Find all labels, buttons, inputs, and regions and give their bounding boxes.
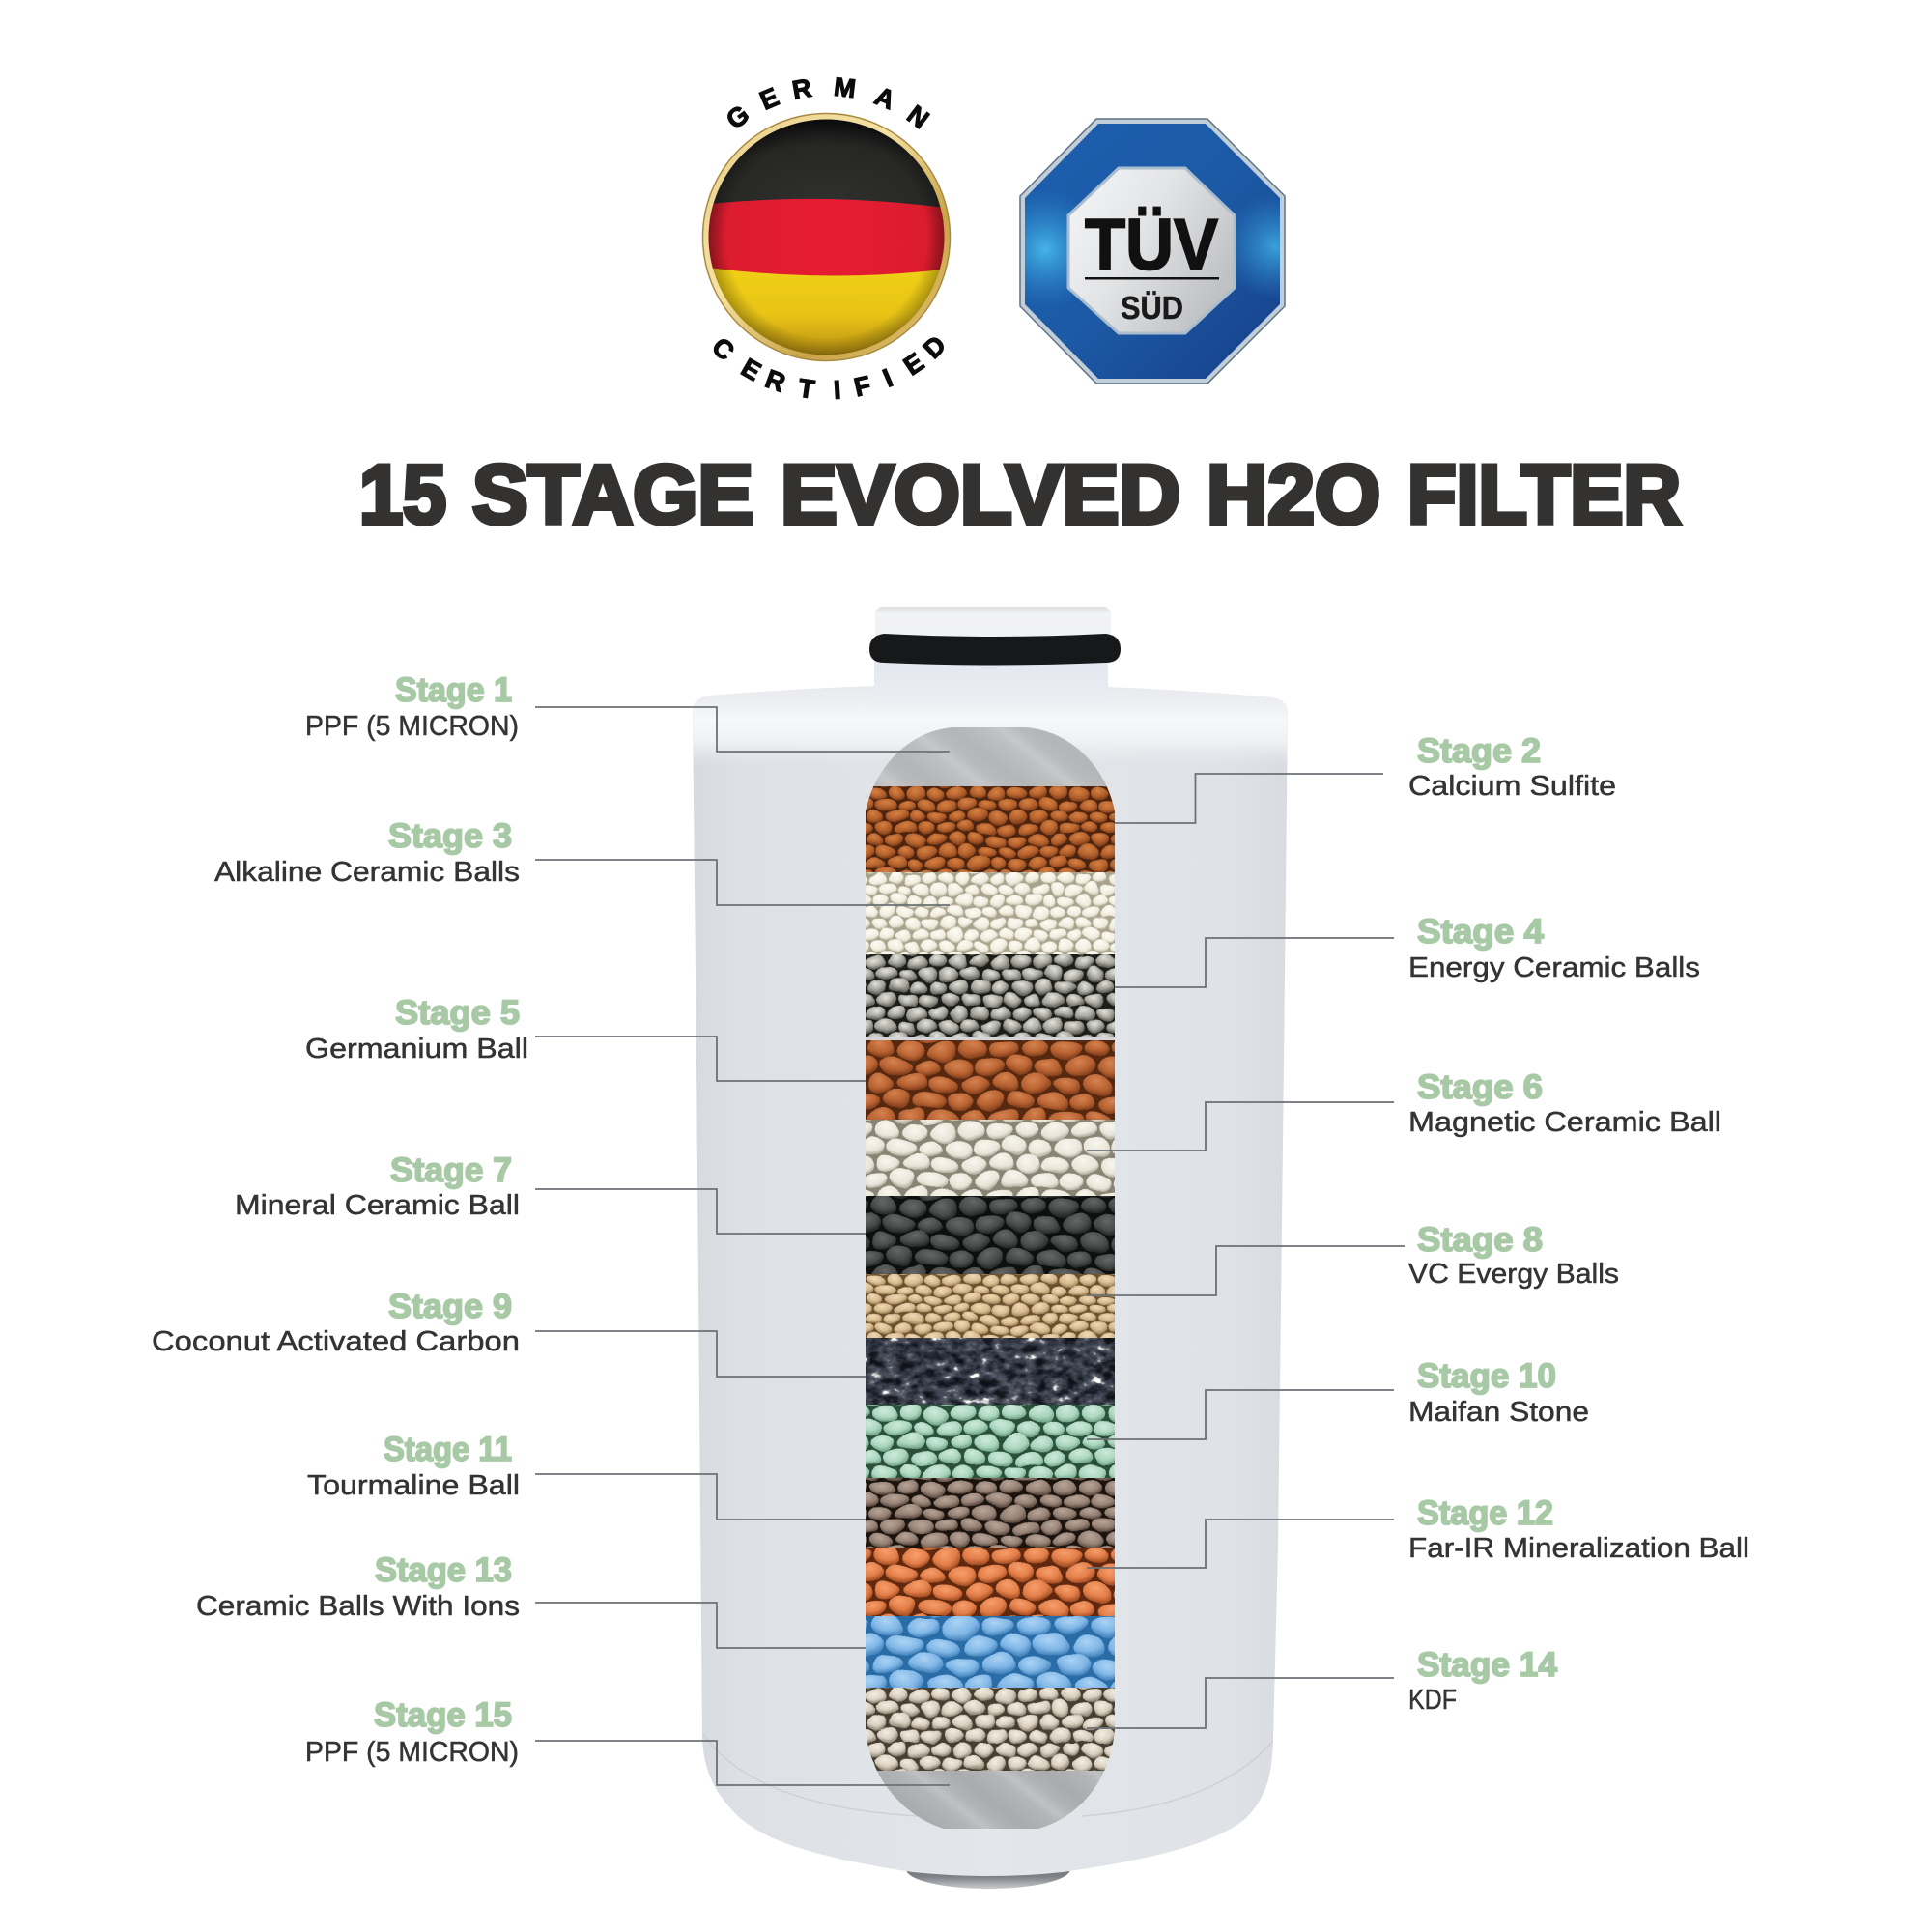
label: stage 4: Energy Ceramic Balls (1408, 952, 1700, 983)
label: stage 8 (1408, 1221, 1619, 1290)
leader: stage 5 (535, 1037, 866, 1081)
label: stage 3 (214, 817, 520, 888)
title: 15 (359, 448, 446, 541)
label: stage 14: KDF (1408, 1685, 1457, 1716)
filter cartridge (676, 607, 1304, 1893)
leader: stage 1 (535, 707, 950, 752)
cartridge body (676, 667, 1304, 1893)
title: H2O (1207, 448, 1380, 541)
bottom stub (906, 1850, 1070, 1889)
label: stage 1: PPF (5 MICRON) (305, 711, 519, 742)
label: stage 6 (1408, 1068, 1721, 1138)
arc text: GERMAN: N (901, 99, 934, 134)
layer: stage 7 (866, 1196, 1115, 1274)
layer: stage 10 (866, 1405, 1115, 1478)
label: stage 2: Calcium Sulfite (1408, 771, 1616, 802)
arc text: CERTIFIED: I (879, 363, 896, 393)
label: stage 4: Stage 4 (1417, 913, 1545, 951)
layer: stage 9 (866, 1338, 1115, 1405)
arc text: GERMAN: R (790, 73, 813, 105)
label: stage 10: Maifan Stone (1408, 1397, 1589, 1428)
label: stage 11: Stage 11 (384, 1431, 512, 1468)
leader: stage 13 (535, 1603, 866, 1648)
label: stage 3: Stage 3 (388, 817, 512, 855)
label: stage 7 (235, 1151, 520, 1221)
arc text: CERTIFIED: I (833, 376, 841, 405)
arc text: CERTIFIED: R (761, 364, 789, 398)
label: stage 7: Mineral Ceramic Ball (235, 1190, 520, 1221)
badge: TUV SUD octagon (1020, 119, 1285, 384)
label: stage 1: Stage 1 (395, 671, 512, 709)
label: stage 12: Far-IR Mineralization Ball (1408, 1533, 1749, 1564)
label: stage 5: Germanium Ball (305, 1034, 528, 1065)
arc text: GERMAN: G (721, 99, 754, 135)
layer: stage 3 (866, 872, 1115, 954)
layer: stage 14 (866, 1688, 1115, 1771)
label: stage 13 (196, 1551, 520, 1622)
arc text: CERTIFIED (706, 330, 952, 405)
leader: stage 7 (535, 1189, 866, 1234)
SUD wordmark: SÜD (1121, 290, 1183, 326)
leader: stage 9 (535, 1331, 866, 1377)
leader: stage 4 (1115, 938, 1394, 987)
label: stage 12: Stage 12 (1417, 1494, 1553, 1532)
label: stage 11: Tourmaline Ball (307, 1470, 520, 1501)
label: stage 3: Alkaline Ceramic Balls (214, 857, 520, 888)
label: stage 2 (1408, 732, 1616, 802)
layer: stage 11 (866, 1478, 1115, 1548)
arc text: CERTIFIED: C (706, 332, 740, 366)
leader: stage 3 (535, 860, 950, 905)
label: stage 12 (1408, 1494, 1749, 1564)
leader: stage 8 (1087, 1246, 1405, 1295)
layer: stage 13 (866, 1616, 1115, 1688)
neck (874, 657, 1108, 710)
leader: stage 10 (1087, 1390, 1394, 1439)
arc text: CERTIFIED: F (851, 370, 873, 402)
layer: stage 6 (866, 1120, 1115, 1196)
title: FILTER (1407, 448, 1681, 541)
label: stage 7: Stage 7 (390, 1151, 512, 1189)
label: stage 8: VC Evergy Balls (1408, 1259, 1619, 1290)
layer: stage 12 (866, 1548, 1115, 1616)
arc text: CERTIFIED: D (918, 330, 952, 364)
arc text: GERMAN: E (755, 82, 783, 116)
TUV wordmark: TÜV (1085, 204, 1218, 285)
leader: stage 6 (1087, 1102, 1394, 1151)
label: stage 9 (152, 1288, 520, 1357)
label: stage 10 (1408, 1357, 1589, 1428)
arc text: CERTIFIED: E (736, 353, 766, 386)
label: stage 5 (305, 994, 528, 1065)
label: stage 6: Magnetic Ceramic Ball (1408, 1107, 1721, 1138)
leader: stage 2 (1115, 774, 1383, 823)
label: stage 9: Stage 9 (388, 1288, 512, 1325)
title: EVOLVED (781, 448, 1180, 541)
label: stage 15: Stage 15 (374, 1696, 512, 1734)
leader: stage 15 (535, 1741, 950, 1785)
label: stage 10: Stage 10 (1417, 1357, 1556, 1395)
label: stage 1 (305, 671, 519, 742)
leader: stage 14 (1087, 1678, 1394, 1728)
label: stage 8: Stage 8 (1417, 1221, 1543, 1259)
flag circle (700, 111, 952, 362)
label: stage 15 (305, 1696, 519, 1768)
label: stage 13: Stage 13 (375, 1551, 512, 1589)
arc text: GERMAN (721, 72, 934, 135)
layer: stage 5 (866, 1040, 1115, 1120)
label: stage 6: Stage 6 (1417, 1068, 1543, 1106)
label: stage 5: Stage 5 (395, 994, 520, 1032)
title: STAGE (472, 448, 753, 541)
label: stage 14: Stage 14 (1417, 1646, 1558, 1684)
label: stage 15: PPF (5 MICRON) (305, 1737, 519, 1768)
label: stage 14 (1408, 1646, 1558, 1716)
arc text: GERMAN: M (833, 72, 857, 103)
label: stage 4 (1408, 913, 1700, 983)
title (359, 448, 1681, 541)
layer: separator (866, 1037, 1115, 1040)
leader: stage 11 (535, 1474, 866, 1520)
arc text: CERTIFIED: T (797, 373, 817, 405)
layer: stage 2 (866, 786, 1115, 872)
label: stage 2: Stage 2 (1417, 732, 1541, 770)
cutaway layers (866, 727, 1115, 1829)
label: stage 13: Ceramic Balls With Ions (196, 1591, 520, 1622)
layer: stage 4 (866, 954, 1115, 1037)
o-ring (869, 634, 1121, 665)
badge: German certified flag (700, 72, 952, 405)
layer: stage 8 (866, 1274, 1115, 1338)
arc text: CERTIFIED: E (898, 347, 929, 381)
leader: stage 12 (1087, 1520, 1394, 1568)
label: stage 11 (307, 1431, 520, 1501)
arc text: GERMAN: A (870, 81, 899, 115)
label: stage 9: Coconut Activated Carbon (152, 1326, 520, 1357)
